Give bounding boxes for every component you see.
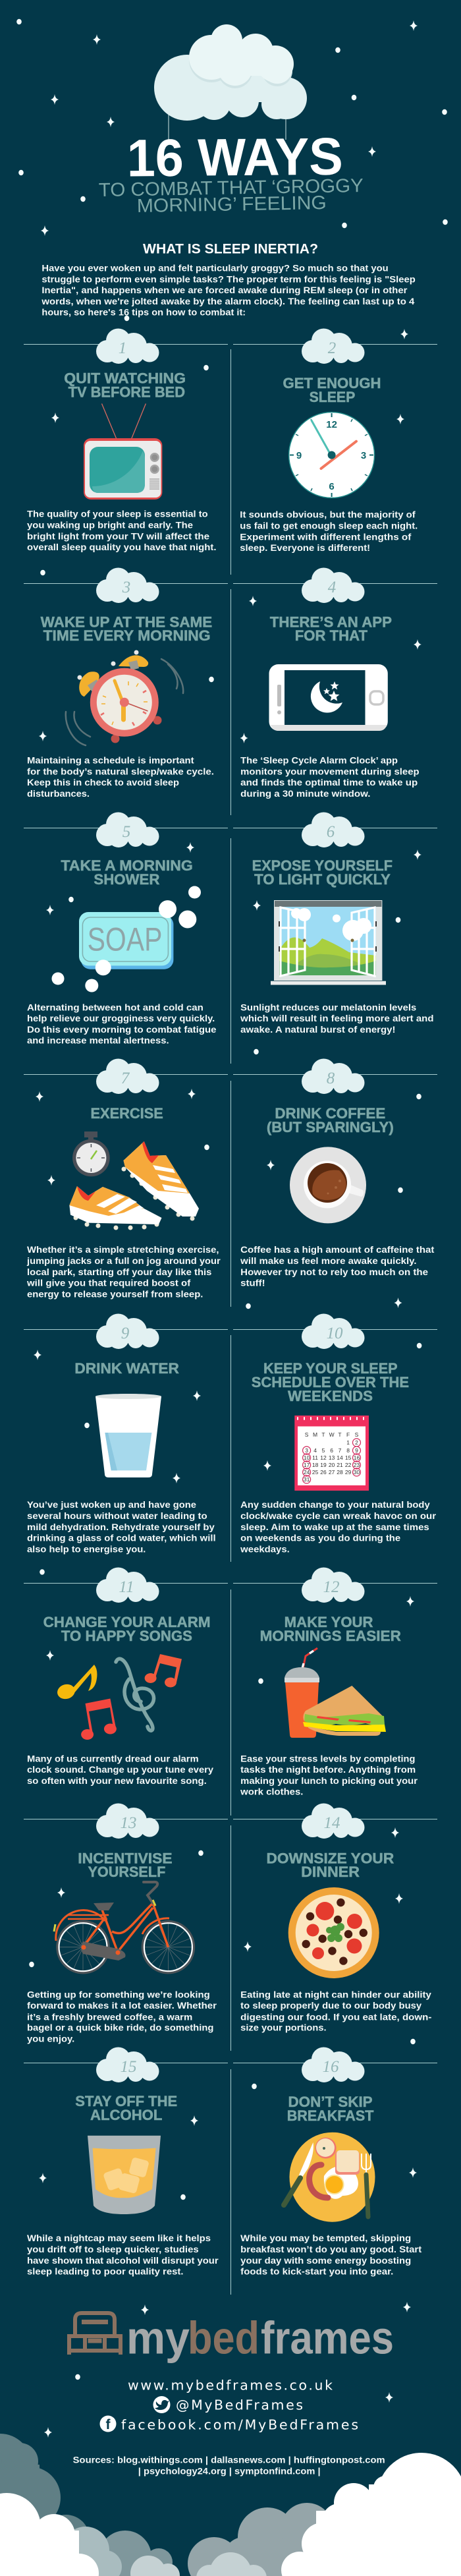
icon: television [84, 403, 162, 500]
icon: calendar: M [313, 1431, 317, 1438]
intro text: Have you ever woken up and felt particularly groggy? So much so that you [41, 264, 389, 273]
header cloud [154, 24, 307, 142]
body tip 14: to sleep properly due to our body busy [240, 2001, 422, 2011]
body tip 2: It sounds obvious, but the majority of [240, 510, 416, 519]
number cloud 2 [302, 328, 365, 364]
body tip 16: foods to kick-start you into gear. [240, 2267, 393, 2277]
heading tip 3: WAKE UP AT THE SAME [41, 614, 212, 630]
heading tip 6: TO LIGHT QUICKLY [254, 871, 391, 888]
icon: smartphone [269, 664, 388, 731]
body tip 13 [27, 1989, 217, 2044]
body tip 11: so often with your new favourite song. [27, 1776, 207, 1786]
icon: calendar: 21 [337, 1462, 343, 1468]
number cloud 1 [96, 328, 159, 364]
number cloud 4 [302, 568, 365, 603]
body tip 15: have shown that alcohol will disrupt your [27, 2256, 219, 2266]
icon: calendar: 11 [312, 1454, 318, 1461]
panel: tip 4 [240, 568, 420, 799]
heading tip 8 [267, 1105, 394, 1135]
sources [73, 2454, 385, 2476]
panel: tip 5 [27, 812, 217, 1046]
body tip 13: forward to makes it a lot easier. Whether [27, 2001, 217, 2011]
panel: tip 11 [27, 1567, 214, 1786]
number cloud 16 [302, 2047, 365, 2082]
icon: alarm clock [66, 650, 183, 745]
body tip 15 [27, 2233, 219, 2277]
heading tip 14 [266, 1850, 394, 1880]
heading tip 11 [43, 1614, 211, 1644]
heading tip 12: MORNINGS EASIER [260, 1628, 401, 1644]
body tip 7: Whether it’s a simple stretching exercise, [27, 1245, 219, 1255]
heading tip 13: YOURSELF [88, 1864, 165, 1880]
body tip 8 [240, 1245, 435, 1288]
icon: wall clock: 3 [361, 450, 366, 461]
body tip 15: While a nightcap may seem like it helps [27, 2233, 211, 2243]
icon: pizza [288, 1887, 379, 1978]
body tip 12: Ease your stress levels by completing [240, 1754, 415, 1763]
panel: tip 14 [240, 1803, 431, 2033]
body tip 4: The ‘Sleep Cycle Alarm Clock’ app [240, 756, 398, 766]
body tip 3 [27, 756, 214, 799]
body tip 4: monitors your movement during sleep [240, 767, 420, 777]
body tip 1 [27, 509, 216, 552]
icon: calendar: 26 [320, 1469, 327, 1475]
body tip 9: also help to energise you. [27, 1545, 146, 1554]
heading tip 8: (BUT SPARINGLY) [267, 1119, 394, 1135]
icon: calendar: F [346, 1431, 350, 1438]
icon: calendar: 14 [337, 1454, 343, 1461]
icon: wall clock [289, 413, 375, 498]
number cloud 15: 15 [120, 2058, 137, 2076]
icon: calendar: 25 [312, 1469, 319, 1475]
bottom clouds [0, 2434, 461, 2576]
body tip 10: Any sudden change to your natural body [240, 1500, 430, 1510]
number cloud 14: 14 [324, 1814, 340, 1832]
heading tip 5: TAKE A MORNING [61, 857, 193, 874]
title [99, 127, 364, 217]
number cloud 7 [96, 1058, 159, 1094]
body tip 9: drinking a glass of cold water, which will [27, 1533, 216, 1543]
body tip 14: digesting our food. If you eat late, down- [240, 2012, 431, 2022]
body tip 16: breakfast won’t do you any good. Start [240, 2245, 422, 2254]
panel: tip 2 [240, 328, 418, 553]
icon: calendar: 13 [329, 1454, 335, 1461]
panel: tip 8 [240, 1058, 435, 1288]
icon: coffee cup [290, 1147, 366, 1223]
body tip 10: weekdays. [240, 1545, 290, 1554]
icon: bed [69, 2313, 121, 2355]
body tip 4: during a 30 minute window. [240, 789, 370, 799]
panel: tip 15 [27, 2047, 219, 2277]
body tip 1: you waking up bright and early. The [27, 521, 194, 530]
body tip 4 [240, 756, 420, 799]
heading tip 5: SHOWER [94, 871, 160, 888]
heading tip 10: SCHEDULE OVER THE [252, 1374, 409, 1390]
icon: calendar: 28 [337, 1469, 343, 1475]
body tip 1: overall sleep quality you have that night. [27, 542, 216, 552]
body tip 11: clock sound. Change up your tune every [27, 1765, 214, 1775]
number cloud 13: 13 [120, 1814, 137, 1832]
heading tip 11: TO HAPPY SONGS [61, 1628, 192, 1644]
body tip 12: tasks the night before. Anything from [240, 1765, 416, 1775]
number cloud 9: 9 [121, 1325, 130, 1342]
number cloud 10: 10 [327, 1325, 343, 1342]
number cloud 11 [96, 1567, 159, 1603]
body tip 6: Sunlight reduces our melatonin levels [240, 1002, 416, 1012]
icon: calendar: 3 [305, 1447, 308, 1454]
logo [69, 2312, 394, 2364]
intro heading: WHAT IS SLEEP INERTIA? [143, 241, 318, 257]
body tip 7 [26, 1245, 221, 1300]
intro text: Inertia", and happens when we are forced awake during REM sleep (or in other [41, 285, 408, 295]
heading tip 14: DOWNSIZE YOUR [266, 1850, 394, 1866]
body tip 5 [27, 1002, 217, 1046]
body tip 9: several hours without water leading to [27, 1511, 207, 1521]
twitter: @MyBedFrames [176, 2397, 303, 2413]
heading tip 10 [252, 1360, 409, 1404]
icon: soap and bubbles: SOAP [88, 921, 162, 958]
heading tip 9: DRINK WATER [74, 1360, 179, 1377]
subtitle [99, 175, 364, 217]
body tip 8: Coffee has a high amount of caffeine that [240, 1245, 435, 1255]
intro text [41, 264, 416, 318]
heading tip 16: BREAKFAST [287, 2107, 374, 2124]
heading tip 16 [287, 2094, 374, 2124]
body tip 13: bagel or a quick bike ride, do something [27, 2023, 213, 2033]
website: www.mybedframes.co.uk [128, 2378, 333, 2393]
title: 16 WAYS [126, 127, 343, 187]
number cloud 13 [96, 1803, 159, 1839]
subtitle: TO COMBAT THAT ‘GROGGY [99, 175, 364, 201]
icon: calendar: W [329, 1431, 335, 1438]
icon: drink and sandwich [285, 1648, 386, 1738]
icon: stopwatch and football boots [69, 1131, 199, 1230]
body tip 8: However try not to rely too much on the [240, 1267, 429, 1277]
icon: calendar: 30 [354, 1469, 360, 1475]
icon: calendar: T [338, 1431, 342, 1438]
body tip 3: for the body’s natural sleep/wake cycle. [27, 767, 214, 777]
body tip 7: will give you that required boost of [26, 1278, 191, 1288]
icon: calendar: 31 [304, 1476, 310, 1483]
body tip 15: you drift off to sleep quicker, studies [27, 2245, 199, 2254]
number cloud 3 [96, 568, 159, 603]
panel: tip 7 [26, 1058, 221, 1300]
heading tip 15: ALCOHOL [90, 2107, 162, 2123]
intro text: hours, so here's 16 tips on how to combat it: [41, 308, 246, 318]
heading tip 4: THERE’S AN APP [270, 614, 392, 630]
icon: bicycle [54, 1882, 194, 1973]
heading tip 3 [41, 614, 212, 644]
heading tip 10: WEEKENDS [288, 1388, 373, 1404]
icon: calendar: 5 [322, 1447, 325, 1454]
number cloud 4: 4 [328, 579, 336, 596]
body tip 12: work clothes. [240, 1787, 303, 1796]
panel: tip 16 [240, 2047, 422, 2277]
number cloud 1: 1 [119, 339, 126, 357]
logo: frames [261, 2312, 394, 2364]
number cloud 14 [302, 1803, 365, 1839]
body tip 14: Eating late at night can hinder our ability [240, 1989, 431, 1999]
heading tip 11: CHANGE YOUR ALARM [43, 1614, 211, 1630]
number cloud 12: 12 [323, 1578, 340, 1596]
icon: calendar: 29 [345, 1469, 352, 1475]
icon: glass of water [95, 1394, 161, 1477]
number cloud 11: 11 [119, 1578, 134, 1596]
icon: soap and bubbles [51, 886, 201, 992]
icon: calendar: 18 [312, 1462, 319, 1468]
heading tip 6: EXPOSE YOURSELF [252, 857, 393, 874]
body tip 2 [240, 510, 418, 553]
body tip 2: sleep. Everyone is different! [240, 543, 370, 553]
body tip 5: Do this every morning to combat fatigue [27, 1025, 217, 1035]
icon: calendar: 9 [355, 1447, 358, 1454]
icon: facebook [100, 2416, 116, 2432]
body tip 16: While you may be tempted, skipping [240, 2233, 411, 2243]
number cloud 6: 6 [327, 823, 335, 841]
icon: calendar: 19 [320, 1462, 327, 1468]
icon: music notes [56, 1654, 182, 1740]
body tip 12: making your lunch to picking out your [240, 1776, 418, 1786]
number cloud 9 [96, 1314, 159, 1349]
icon: breakfast plate [284, 2132, 375, 2222]
body tip 13: you enjoy. [27, 2034, 74, 2044]
icon: calendar: 1 [346, 1439, 350, 1446]
panel: tip 10 [240, 1314, 437, 1554]
body tip 3: Maintaining a schedule is important [27, 756, 194, 766]
body tip 16: your day with some energy boosting [240, 2256, 411, 2266]
body tip 9: You’ve just woken up and have gone [27, 1500, 197, 1510]
icon: calendar: 24 [304, 1469, 310, 1475]
logo: my [126, 2312, 190, 2364]
body tip 1: The quality of your sleep is essential to [27, 509, 208, 519]
icon: calendar: 16 [354, 1454, 360, 1461]
icon: calendar: 10 [304, 1454, 310, 1461]
body tip 10 [240, 1500, 437, 1554]
icon: calendar: S [305, 1431, 309, 1438]
body tip 1: bright light from your TV will affect the [27, 531, 210, 542]
body tip 7: energy to release yourself from sleep. [27, 1290, 203, 1300]
number cloud 10 [302, 1314, 365, 1349]
number cloud 3: 3 [122, 579, 130, 596]
heading tip 14: DINNER [301, 1864, 360, 1880]
icon: calendar: 27 [329, 1469, 335, 1475]
number cloud 5 [96, 812, 159, 847]
body tip 12 [240, 1754, 418, 1796]
body tip 10: clock/wake cycle can wreak havoc on our [240, 1511, 437, 1521]
icon: calendar: 7 [339, 1447, 342, 1454]
number cloud 6 [302, 812, 365, 847]
icon: wall clock: 9 [296, 450, 302, 461]
sources: | psychology24.org | symptonfind.com | [138, 2466, 321, 2476]
intro text: words, when we're jolted awake by the alarm clock). The feeling can last up to 4 [41, 297, 415, 306]
heading tip 13: INCENTIVISE [78, 1850, 173, 1866]
icon: calendar: 12 [320, 1454, 327, 1461]
body tip 3: Keep this in check to avoid sleep [27, 778, 179, 787]
heading tip 2: SLEEP [310, 389, 355, 405]
heading tip 7: EXERCISE [91, 1105, 163, 1122]
body tip 14: size your portions. [240, 2023, 327, 2033]
body tip 9 [27, 1500, 216, 1554]
panel: tip 1 [27, 328, 216, 552]
number cloud 7: 7 [121, 1070, 130, 1087]
icon: facebook: f [105, 2417, 111, 2432]
body tip 8: will make us feel more awake quickly. [240, 1256, 417, 1266]
body tip 2: us fail to get enough sleep each night. [240, 521, 418, 531]
heading tip 5 [61, 857, 193, 888]
body tip 5: and increase mental alertness. [27, 1036, 169, 1046]
heading tip 12 [260, 1614, 401, 1644]
heading tip 4 [270, 614, 392, 644]
heading tip 1 [64, 370, 186, 400]
body tip 11: Many of us currently dread our alarm [27, 1754, 199, 1763]
number cloud 12 [302, 1567, 365, 1603]
heading tip 12: MAKE YOUR [285, 1614, 373, 1630]
body tip 6: which will result in feeling more alert and [240, 1014, 433, 1023]
body tip 4: and finds the optimal time to wake up [240, 778, 418, 787]
icon: calendar: 20 [329, 1462, 335, 1468]
icon: wall clock: 6 [329, 481, 335, 492]
heading tip 6 [252, 857, 393, 888]
body tip 13: Getting up for something we’re looking [27, 1989, 210, 1999]
panel: tip 12 [240, 1567, 418, 1796]
facebook: facebook.com/MyBedFrames [121, 2417, 358, 2433]
panel: tip 9 [27, 1314, 216, 1554]
panel: tip 3 [27, 568, 214, 799]
body tip 6: awake. A natural burst of energy! [240, 1025, 395, 1035]
body tip 7: jumping jacks or a full on jog around your [26, 1256, 221, 1266]
icon: calendar: 23 [354, 1462, 360, 1468]
heading tip 2 [283, 375, 381, 405]
icon: calendar: 6 [330, 1447, 333, 1454]
heading tip 4: FOR THAT [295, 627, 368, 644]
body tip 11 [27, 1754, 214, 1786]
heading tip 16: DON’T SKIP [288, 2094, 373, 2110]
panel: tip 6 [240, 812, 433, 1035]
icon: calendar: 17 [304, 1462, 310, 1468]
subtitle: MORNING’ FEELING [137, 192, 327, 217]
body tip 10: on weekends as you do during the [240, 1533, 401, 1543]
heading tip 1: TV BEFORE BED [68, 384, 185, 400]
number cloud 5: 5 [122, 823, 130, 841]
heading tip 8: DRINK COFFEE [275, 1105, 385, 1122]
intro text: struggle to perform even simple tasks? The proper term for this feeling is "Sleep [41, 274, 416, 284]
body tip 16 [240, 2233, 422, 2277]
heading tip 2: GET ENOUGH [283, 375, 381, 391]
body tip 2: Experiment with different lengths of [240, 532, 412, 542]
body tip 5: help relieve our grogginess very quickly. [27, 1014, 215, 1023]
body tip 5: Alternating between hot and cold can [27, 1002, 203, 1012]
number cloud 15 [96, 2047, 159, 2082]
icon: calendar: 2 [355, 1439, 358, 1446]
body tip 7: local park, starting off your day like this [27, 1267, 211, 1277]
body tip 10: sleep. Aim to wake up at the same times [240, 1522, 429, 1532]
icon: calendar: 8 [346, 1447, 350, 1454]
icon: calendar [294, 1416, 369, 1491]
body tip 13: it’s a freshly brewed coffee, a warm [27, 2012, 192, 2022]
heading tip 15 [75, 2093, 177, 2123]
icon: open window [271, 900, 386, 985]
heading tip 3: TIME EVERY MORNING [43, 627, 211, 644]
heading tip 13 [78, 1850, 173, 1880]
icon: calendar: T [321, 1431, 325, 1438]
number cloud 8 [302, 1058, 365, 1094]
body tip 14 [240, 1989, 431, 2033]
number cloud 2: 2 [328, 339, 336, 357]
icon: calendar: 15 [345, 1454, 352, 1461]
sources: Sources: blog.withings.com | dallasnews.com | huffingtonpost.com [73, 2454, 385, 2465]
icon: calendar: 22 [345, 1462, 352, 1468]
logo: bed [188, 2312, 259, 2364]
body tip 8: stuff! [240, 1278, 265, 1288]
heading tip 10: KEEP YOUR SLEEP [263, 1360, 398, 1377]
icon: wall clock: 12 [326, 419, 337, 430]
icon: calendar: 4 [313, 1447, 317, 1454]
number cloud 8: 8 [327, 1070, 335, 1087]
icon: twitter [153, 2396, 170, 2413]
body tip 15: sleep leading to poor quality rest. [27, 2267, 183, 2277]
panel: tip 13 [27, 1803, 217, 2044]
icon: calendar: S [355, 1431, 359, 1438]
icon: whisky glass [88, 2136, 161, 2214]
body tip 6 [240, 1002, 433, 1035]
body tip 3: disturbances. [27, 789, 90, 799]
heading tip 1: QUIT WATCHING [64, 370, 186, 386]
heading tip 15: STAY OFF THE [75, 2093, 177, 2109]
body tip 9: mild dehydration. Rehydrate yourself by [27, 1522, 215, 1532]
number cloud 16: 16 [323, 2058, 339, 2076]
